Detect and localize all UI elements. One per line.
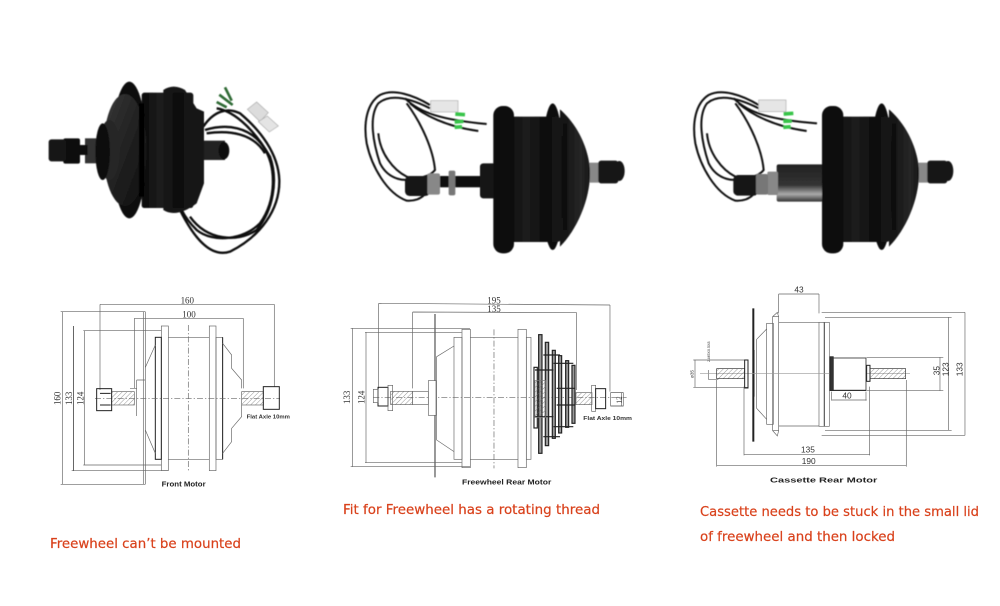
dimension lines [351,303,623,467]
motor outline [95,325,280,472]
green terminals [783,113,793,127]
dimension values: 133 [342,390,352,404]
dimension values [689,285,965,466]
note: cassette motor: of freewheel and then locked [700,529,895,545]
dimension values: 124 [76,391,86,405]
dimension lines [693,294,965,467]
right axle [576,385,623,411]
note: cassette motor: Cassette needs to be stuck in the small lid [700,504,979,520]
motor outline [373,314,627,477]
axle with nuts [405,163,497,198]
motor outline [700,308,910,442]
cassette carrier [830,357,870,391]
green terminals [217,87,233,107]
splined axles [717,360,906,388]
drawing caption: Front Motor [162,480,206,489]
white connector [247,102,278,132]
panel: cassette rear motor drawing [689,285,965,484]
dimension values: ø35 [689,370,694,378]
freewheel sprockets [534,335,575,453]
right axle [242,387,279,409]
axle note: Flat Axle 10mm [247,414,290,420]
motor body [822,103,919,253]
dimension values: 135 [487,304,501,314]
note: front motor: Freewheel can’t be mounted [50,536,241,552]
dimension values: 2-M5X0.5X8 [707,341,711,362]
dimension values: 133 [955,362,965,376]
panel: freewheel rear motor drawing [342,295,632,486]
motor body [493,103,590,253]
white connector [431,101,458,112]
drawing caption: Cassette Rear Motor [770,475,877,484]
left axle and nut [49,123,110,180]
dimension values: 35 [931,366,941,375]
white connector [759,100,786,112]
left axle [373,385,413,411]
panel: front motor drawing [53,296,290,489]
right axle [587,161,625,183]
motor wires [180,108,279,253]
dimension values: 40 [842,391,852,401]
panel: front motor photo [49,82,279,253]
dimension values: 124 [357,390,367,404]
dimension values: 123 [940,362,950,376]
cassette carrier [733,164,823,202]
drawing caption: Freewheel Rear Motor [462,477,551,486]
dimension values: 100 [182,310,196,320]
dimension values: 133 [64,391,74,405]
note: freewheel motor: Fit for Freewheel has a rotating thread [343,502,600,518]
green terminals [455,114,465,127]
dimension values: 190 [802,456,816,466]
motor wires [694,92,817,201]
right axle [202,141,229,160]
dimension values [53,296,196,405]
dimension values: 195 [487,295,501,305]
dimension values: 160 [53,391,63,405]
dimension values: 12 [614,396,623,404]
note: cassette motor [700,504,979,545]
dimension lines [61,304,274,484]
dimension values: 135 [801,445,815,455]
dimension values [342,295,623,404]
motor wires [365,92,487,201]
motor body [99,82,204,218]
dimension values: 160 [181,296,195,306]
panel: freewheel motor photo [365,92,625,253]
dimension values: 43 [794,285,804,295]
axle note: Flat Axle 10mm [583,416,632,422]
right axle [916,161,953,183]
panel: cassette motor photo [694,92,953,253]
left axle [97,389,134,411]
